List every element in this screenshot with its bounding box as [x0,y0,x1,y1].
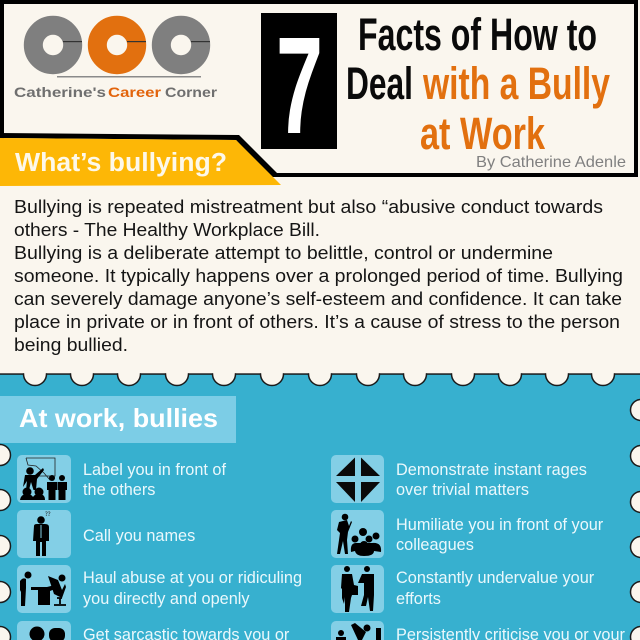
label text: you directly and openly [83,590,250,608]
label text: Humiliate you in front of your [396,516,604,534]
intro text: being bullied. [14,334,128,355]
label text: the others [83,481,155,499]
icon tile: sarcastic [17,621,71,640]
label text: colleagues [396,536,474,554]
banner: What's bullying? [0,133,281,186]
label text: Call you names [83,527,195,545]
byline: By Catherine Adenle [476,154,626,171]
label text: Constantly undervalue your [396,569,595,587]
icon tile: call names [17,510,71,558]
blue panel with scalloped edge [0,360,640,640]
intro text: can severely damage anyone’s self-esteem and confidence. It can take [14,288,622,309]
title: at Work [420,108,546,159]
heading: At work, bullies [0,396,236,443]
header panel [2,2,636,175]
label text: Haul abuse at you or ridiculing [83,569,302,587]
intro text: someone. It typically happens over a prolonged period of time. Bullying [14,265,623,286]
title [346,9,610,159]
label text: Label you in front of [83,461,226,479]
intro text: Bullying is repeated mistreatment but also “abusive conduct towards [14,196,603,217]
label text: efforts [396,590,441,608]
banner: What's bullying?: What’s bullying? [15,149,227,177]
label text: over trivial matters [396,481,529,499]
title: Deal [346,58,413,109]
icon tile: undervalue [331,565,384,613]
icon tile: label in front of others [17,455,71,503]
label text: Demonstrate instant rages [396,461,587,479]
icon tile: haul abuse [17,565,71,613]
logo: Catherine's Career Corner: Career [108,84,162,100]
icon tile: call names: ⁇ [45,512,51,518]
logo: Catherine's Career Corner: Corner [165,84,218,100]
intro text [14,196,623,355]
big number 7 [261,9,337,163]
icon tile: humiliate [331,510,384,558]
intro text: place in private or in front of others. It’s a cause of stress to the person [14,311,620,332]
intro text: Bullying is a deliberate attempt to belittle, control or undermine [14,242,553,263]
icon tile: criticise [331,621,384,640]
heading: At work, bullies: At work, bullies [19,403,218,433]
big number 7: 7 [276,9,323,163]
logo: Catherine's Career Corner [14,25,218,100]
intro text: others - The Healthy Workplace Bill. [14,219,320,240]
icon tile: instant rages [331,455,384,503]
logo: Catherine's Career Corner: Catherine's [14,84,106,100]
